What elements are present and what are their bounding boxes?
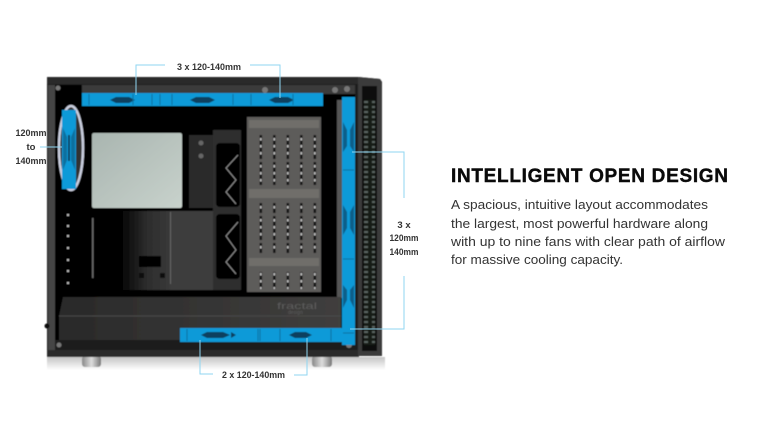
rear knob	[44, 324, 50, 328]
cable openings with zigzag	[216, 143, 240, 279]
body text: for massive cooling capacity.	[451, 252, 623, 267]
label: left fan: to	[27, 142, 36, 153]
label: top fans: 3 x 120-140mm	[177, 62, 241, 73]
label: right fans: 3 x	[397, 220, 411, 231]
right interior post	[337, 100, 342, 298]
drive cages	[247, 117, 321, 292]
bottom rail	[55, 340, 358, 350]
callout line: bottom fans	[200, 338, 307, 375]
case body	[47, 77, 382, 356]
label: right fans: 120mm	[390, 233, 418, 244]
fan: top row	[82, 93, 323, 106]
fan: right front column	[342, 97, 355, 345]
body text	[450, 197, 726, 267]
top rail	[82, 85, 355, 94]
floor shadow	[47, 357, 385, 370]
body text: A spacious, intuitive layout accommodates	[451, 197, 709, 212]
shroud logo	[277, 301, 317, 316]
rear fan ring	[59, 106, 83, 190]
shroud logo: fractal	[277, 301, 317, 311]
fan: bottom row	[180, 328, 342, 342]
label: right fans: 140mm	[390, 247, 418, 258]
body text: the largest, most powerful hardware along	[451, 216, 708, 231]
label: right fans	[390, 220, 418, 258]
left frame edge	[48, 85, 55, 350]
base plate	[47, 350, 359, 357]
label: bottom fans: 2 x 120-140mm	[222, 370, 285, 381]
expansion slots	[67, 214, 94, 284]
callout line: top fans	[136, 65, 280, 98]
power supply panel	[92, 133, 182, 208]
label: left fan	[16, 128, 46, 167]
label: left fan: 120mm	[16, 128, 46, 139]
label: left fan: 140mm	[16, 156, 46, 167]
screws	[56, 86, 352, 348]
interior	[52, 85, 355, 350]
body text: with up to nine fans with clear path of airflow	[450, 234, 726, 249]
callout line: right fans	[350, 152, 404, 329]
power supply shroud	[59, 297, 341, 340]
right side panel	[358, 77, 382, 356]
heading: INTELLIGENT OPEN DESIGN	[451, 166, 728, 187]
shroud logo: design	[288, 310, 303, 316]
computer case photo	[44, 77, 385, 370]
fan: left rear	[62, 110, 76, 189]
feet	[82, 356, 332, 367]
motherboard tray	[122, 130, 241, 290]
top panel	[47, 77, 359, 84]
callout line: left fan	[40, 146, 62, 148]
